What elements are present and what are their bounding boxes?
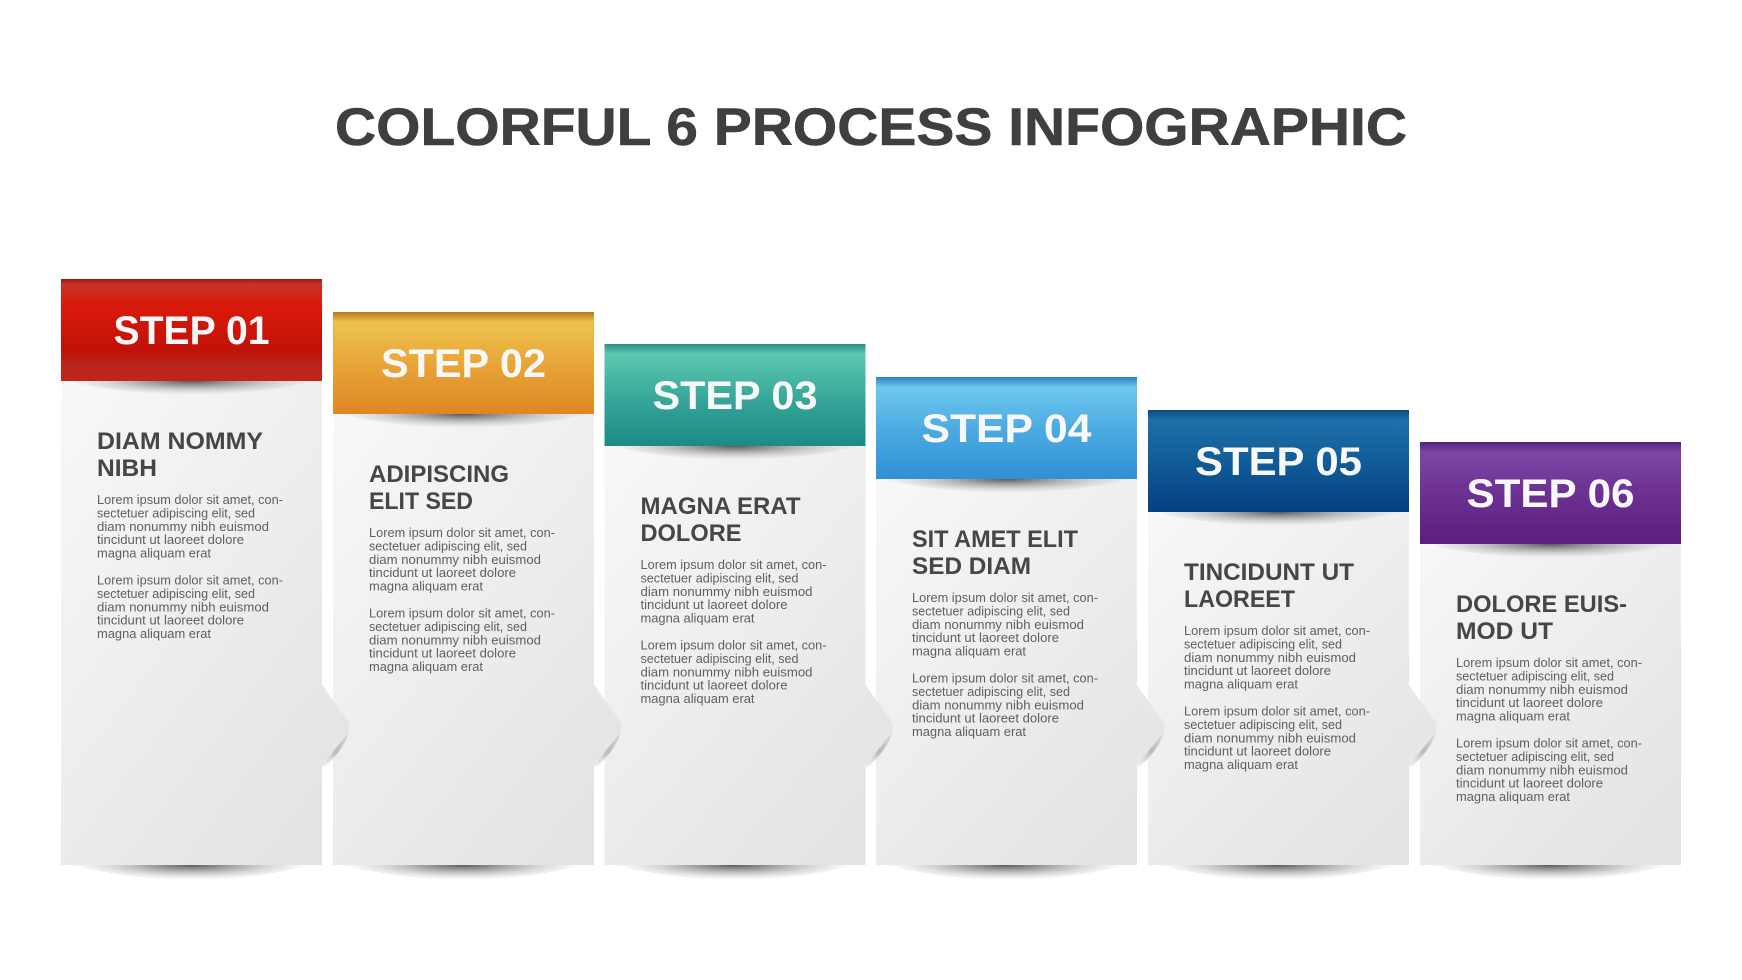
body paragraph 2: sectetuer adipiscing elit, sed <box>97 586 255 601</box>
heading: LAOREET <box>1184 586 1295 613</box>
body paragraph 2: tincidunt ut laoreet dolore <box>1184 744 1331 759</box>
body paragraph 2: diam nonummy nibh euismod <box>1456 762 1628 777</box>
body paragraph 1: tincidunt ut laoreet dolore <box>912 630 1059 645</box>
card body with arrow <box>1148 410 1436 865</box>
body paragraph 2 <box>1456 736 1642 804</box>
card body with arrow <box>61 279 350 865</box>
body paragraph 2: sectetuer adipiscing elit, sed <box>1456 749 1614 764</box>
arrow shadow <box>322 732 349 768</box>
heading: DIAM NOMMY <box>97 428 263 455</box>
heading: MAGNA ERAT <box>640 493 801 520</box>
heading <box>1456 591 1627 645</box>
body paragraph 2: magna aliquam erat <box>369 659 483 674</box>
body paragraph 2: magna aliquam erat <box>912 724 1026 739</box>
heading: DOLORE EUIS- <box>1456 591 1627 618</box>
heading: SED DIAM <box>912 553 1031 580</box>
card body with arrow <box>876 377 1164 865</box>
body paragraph 2: Lorem ipsum dolor sit amet, con- <box>1184 704 1370 718</box>
panel: step 01 <box>61 279 350 880</box>
body paragraph 2: Lorem ipsum dolor sit amet, con- <box>369 606 555 620</box>
body paragraph 2: tincidunt ut laoreet dolore <box>369 646 516 661</box>
card text <box>912 407 1098 739</box>
step label: STEP 06 <box>1466 472 1634 516</box>
body paragraph 1: sectetuer adipiscing elit, sed <box>640 570 798 585</box>
body paragraph 2: magna aliquam erat <box>1456 789 1570 804</box>
step label: STEP 05 <box>1195 440 1362 484</box>
heading <box>369 461 509 515</box>
body paragraph 2: magna aliquam erat <box>640 691 755 706</box>
body paragraph 1: tincidunt ut laoreet dolore <box>97 532 244 547</box>
heading: TINCIDUNT UT <box>1184 559 1354 586</box>
body paragraph 1: Lorem ipsum dolor sit amet, con- <box>1456 655 1642 670</box>
step label: STEP 03 <box>652 374 818 418</box>
body paragraph 2: tincidunt ut laoreet dolore <box>640 678 788 693</box>
body paragraph 1: sectetuer adipiscing elit, sed <box>1456 668 1614 683</box>
arrow shadow <box>594 732 621 768</box>
heading <box>1184 559 1354 613</box>
arrow shadow <box>866 732 892 768</box>
card body with arrow <box>333 312 622 865</box>
body paragraph 1: magna aliquam erat <box>1456 709 1570 724</box>
card body with arrow <box>604 344 893 865</box>
body paragraph 2 <box>1184 704 1370 772</box>
card text <box>1184 440 1370 772</box>
card bottom shadow <box>886 865 1127 880</box>
card text <box>1456 472 1642 804</box>
body paragraph 1: diam nonummy nibh euismod <box>1456 682 1628 697</box>
body paragraph 1: tincidunt ut laoreet dolore <box>1184 663 1331 678</box>
panel: step 04 <box>876 377 1164 880</box>
body paragraph 1 <box>1456 655 1642 724</box>
body paragraph 1: sectetuer adipiscing elit, sed <box>369 538 527 553</box>
body paragraph 1 <box>97 492 283 561</box>
body paragraph 1: sectetuer adipiscing elit, sed <box>912 603 1070 618</box>
card text <box>640 374 826 706</box>
body paragraph 1: magna aliquam erat <box>1184 677 1298 692</box>
heading <box>640 493 801 547</box>
body paragraph 2 <box>97 572 283 641</box>
body paragraph 1 <box>912 590 1098 659</box>
body paragraph 2: diam nonummy nibh euismod <box>97 599 269 614</box>
heading <box>912 526 1078 580</box>
header shadow <box>1153 512 1404 526</box>
header shadow <box>66 381 317 395</box>
header band <box>1420 442 1681 544</box>
body paragraph 2: magna aliquam erat <box>97 626 211 641</box>
body paragraph 2: diam nonummy nibh euismod <box>369 632 541 647</box>
body paragraph 2: sectetuer adipiscing elit, sed <box>640 651 798 666</box>
card bottom shadow <box>343 865 584 880</box>
header band <box>1148 410 1409 512</box>
body paragraph 1: Lorem ipsum dolor sit amet, con- <box>1184 623 1370 638</box>
card bottom shadow <box>71 865 312 880</box>
body paragraph 1: Lorem ipsum dolor sit amet, con- <box>912 590 1098 605</box>
card text <box>369 342 555 674</box>
body paragraph 1: magna aliquam erat <box>640 611 755 626</box>
step label: STEP 04 <box>922 407 1092 451</box>
card text <box>97 309 283 641</box>
panel: step 02 <box>333 312 622 880</box>
body paragraph 1: Lorem ipsum dolor sit amet, con- <box>97 492 283 507</box>
body paragraph 1: magna aliquam erat <box>369 579 483 594</box>
body paragraph 1: Lorem ipsum dolor sit amet, con- <box>369 525 555 540</box>
body paragraph 2: magna aliquam erat <box>1184 757 1298 772</box>
body paragraph 1 <box>1184 623 1370 692</box>
title: COLORFUL 6 PROCESS INFOGRAPHIC <box>335 98 1407 157</box>
body paragraph 1: Lorem ipsum dolor sit amet, con- <box>640 557 826 572</box>
panel: step 06 <box>1420 442 1681 880</box>
body paragraph 1 <box>640 557 826 626</box>
header band <box>876 377 1137 479</box>
body paragraph 1: diam nonummy nibh euismod <box>369 552 541 567</box>
body paragraph 1: tincidunt ut laoreet dolore <box>369 565 516 580</box>
body paragraph 2: Lorem ipsum dolor sit amet, con- <box>912 670 1098 686</box>
body paragraph 1: tincidunt ut laoreet dolore <box>1456 695 1603 710</box>
body paragraph 2: tincidunt ut laoreet dolore <box>912 711 1059 726</box>
header shadow <box>610 446 860 460</box>
body paragraph 1: diam nonummy nibh euismod <box>912 617 1084 632</box>
header band <box>333 312 594 414</box>
body paragraph 1: diam nonummy nibh euismod <box>97 519 269 534</box>
heading: MOD UT <box>1456 618 1553 645</box>
card bottom shadow <box>614 865 856 880</box>
heading: NIBH <box>97 455 157 482</box>
body paragraph 2: Lorem ipsum dolor sit amet, con- <box>1456 736 1642 750</box>
body paragraph 1 <box>369 525 555 594</box>
card bottom shadow <box>1430 865 1671 880</box>
card bottom shadow <box>1158 865 1399 880</box>
heading: ADIPISCING <box>369 461 509 488</box>
body paragraph 1: tincidunt ut laoreet dolore <box>640 597 788 612</box>
header band <box>604 344 866 446</box>
body paragraph 2: sectetuer adipiscing elit, sed <box>369 619 527 634</box>
body paragraph 2: diam nonummy nibh euismod <box>912 697 1084 712</box>
body paragraph 2 <box>369 606 555 674</box>
arrow shadow <box>1409 732 1436 768</box>
body paragraph 2: sectetuer adipiscing elit, sed <box>1184 717 1342 732</box>
header shadow <box>338 414 589 428</box>
heading: DOLORE <box>640 520 742 547</box>
body paragraph 2 <box>640 638 826 706</box>
panel: step 03 <box>604 344 893 880</box>
body paragraph 2: sectetuer adipiscing elit, sed <box>912 684 1070 699</box>
arrow shadow <box>1137 732 1164 768</box>
heading: ELIT SED <box>369 488 473 515</box>
body paragraph 2: diam nonummy nibh euismod <box>1184 730 1356 745</box>
card body <box>1420 442 1681 865</box>
heading <box>97 428 263 482</box>
body paragraph 2: tincidunt ut laoreet dolore <box>97 613 244 628</box>
body paragraph 2: tincidunt ut laoreet dolore <box>1456 776 1603 791</box>
body paragraph 1: magna aliquam erat <box>912 644 1026 659</box>
body paragraph 1: magna aliquam erat <box>97 546 211 561</box>
body paragraph 1: diam nonummy nibh euismod <box>1184 650 1356 665</box>
panel: step 05 <box>1148 410 1436 880</box>
body paragraph 1: sectetuer adipiscing elit, sed <box>97 505 255 520</box>
body paragraph 1: sectetuer adipiscing elit, sed <box>1184 636 1342 651</box>
step label: STEP 01 <box>114 309 270 353</box>
body paragraph 1: diam nonummy nibh euismod <box>640 584 812 599</box>
body paragraph 2: Lorem ipsum dolor sit amet, con- <box>640 638 826 652</box>
heading: SIT AMET ELIT <box>912 526 1078 553</box>
header band <box>61 279 322 381</box>
body paragraph 2 <box>912 670 1098 739</box>
step label: STEP 02 <box>381 342 546 386</box>
header shadow <box>881 479 1132 493</box>
header shadow <box>1425 544 1676 558</box>
body paragraph 2: diam nonummy nibh euismod <box>640 664 812 679</box>
body paragraph 2: Lorem ipsum dolor sit amet, con- <box>97 572 283 588</box>
